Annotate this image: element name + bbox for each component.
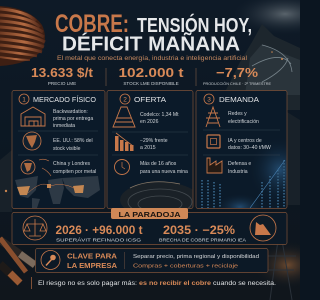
icon: headframe bbox=[113, 107, 135, 127]
panel: demanda: IA y centros de bbox=[228, 138, 262, 144]
panel: demanda: Redes y bbox=[228, 111, 247, 117]
panel: la paradoja bbox=[12, 212, 287, 244]
panel: mercado físico: MERCADO FÍSICO bbox=[33, 95, 97, 104]
data center bbox=[201, 148, 286, 208]
panel: demanda: Defensa e bbox=[228, 161, 251, 167]
panel: mercado físico: 1 bbox=[22, 96, 26, 104]
panel: clave para la empresa bbox=[36, 248, 268, 272]
panel: demanda: electrificación bbox=[228, 119, 259, 125]
badge: la paradoja: LA PARADOJA bbox=[118, 210, 181, 219]
panel: oferta: en 2026 bbox=[140, 119, 159, 125]
mine landscape bbox=[0, 0, 320, 212]
panel: clave para la empresa: CLAVE PARA bbox=[67, 254, 117, 260]
closing statement: cuando se necesita. bbox=[213, 280, 276, 287]
icon: globe with arrows bbox=[21, 159, 51, 176]
panel: demanda: Industria bbox=[228, 169, 248, 175]
panel: mercado físico: inmediata bbox=[53, 123, 75, 129]
world map bbox=[15, 176, 100, 208]
panel: mercado físico: prima por entrega bbox=[53, 116, 93, 122]
closing statement bbox=[32, 277, 276, 289]
icon: globe americas bbox=[23, 132, 41, 150]
panel: oferta: 2 bbox=[123, 96, 127, 104]
panel: clave para la empresa: Compras + coberturas + reciclaje bbox=[133, 264, 238, 270]
title bbox=[55, 10, 252, 56]
closing statement: El riesgo no es solo pagar más: bbox=[38, 280, 137, 287]
kpi: stock: 102.000 t bbox=[118, 65, 184, 80]
panel: mercado físico: compiten por metal bbox=[53, 169, 96, 175]
copper coil bbox=[0, 6, 45, 66]
panel: oferta: −29% frente bbox=[140, 138, 168, 144]
panel: mercado físico: China y Londres bbox=[53, 161, 91, 167]
icon: pylon bbox=[206, 107, 220, 127]
panel: la paradoja: SUPERÁVIT REFINADO ICSG bbox=[56, 236, 141, 244]
power lines bbox=[253, 240, 320, 300]
panel: oferta: Más de 16 años bbox=[140, 161, 177, 167]
icon: warehouse bbox=[21, 107, 45, 126]
panel: la paradoja: BRECHA DE COBRE PRIMARIO IEA bbox=[159, 238, 247, 244]
closing statement: es no recibir el cobre bbox=[139, 280, 211, 287]
panel: mercado físico: stock visible bbox=[53, 146, 81, 152]
panel: demanda bbox=[196, 90, 288, 209]
panel: mercado físico: EE. UU.: 58% del bbox=[53, 138, 93, 144]
panel: demanda: 3 bbox=[207, 96, 211, 104]
kpi: precio: 13.633 $/t bbox=[31, 65, 94, 80]
title: COBRE: bbox=[55, 10, 129, 38]
kpi: producción: PRODUCCIÓN CHILE · 2º TRIMESTRE bbox=[203, 81, 271, 86]
icon: key bbox=[41, 250, 60, 270]
kpi: precio bbox=[31, 65, 94, 86]
panel: clave para la empresa: Separar precio, prima regional y disponibilidad bbox=[133, 254, 259, 260]
icon: clock bbox=[114, 160, 130, 174]
kpi: stock bbox=[118, 65, 184, 86]
panel: la paradoja: 2035 · −25% bbox=[163, 225, 235, 237]
icon: falling chart bbox=[250, 215, 276, 241]
mine terraces bbox=[120, 181, 192, 208]
panel: oferta bbox=[106, 90, 194, 209]
panel: clave para la empresa: LA EMPRESA bbox=[67, 263, 117, 270]
panel: la paradoja: 2026 · +96.000 t bbox=[56, 225, 143, 237]
panel: oferta: a 2015 bbox=[140, 145, 156, 151]
cables bbox=[0, 238, 35, 283]
panel: demanda: DEMANDA bbox=[219, 97, 259, 104]
title: DÉFICIT MAÑANA bbox=[62, 32, 240, 56]
kpi: stock: STOCK LME DISPONIBLE bbox=[123, 81, 179, 86]
panel: oferta: OFERTA bbox=[134, 97, 166, 104]
title: TENSIÓN HOY, bbox=[137, 13, 252, 37]
panel: oferta: Codelco: 1,34 Mt bbox=[140, 112, 179, 118]
kpi: producción bbox=[203, 65, 271, 86]
panel: oferta: para una nueva mina bbox=[140, 169, 188, 175]
badge: la paradoja bbox=[111, 208, 188, 219]
panel: demanda: datos: 30–40 t/MW bbox=[228, 145, 271, 151]
panel: mercado físico bbox=[12, 90, 105, 208]
icon: factory bbox=[207, 158, 222, 173]
icon: scales bbox=[23, 216, 47, 240]
subtitle: El metal que conecta energía, industria e inteligencia artificial bbox=[57, 55, 247, 62]
icon: chip bbox=[207, 135, 220, 148]
kpi: producción: −7,7% bbox=[216, 65, 258, 80]
panel: mercado físico: Backwardation: bbox=[53, 109, 88, 115]
icon: falling bars bbox=[115, 133, 134, 151]
kpi: precio: PRECIO LME bbox=[48, 81, 76, 86]
